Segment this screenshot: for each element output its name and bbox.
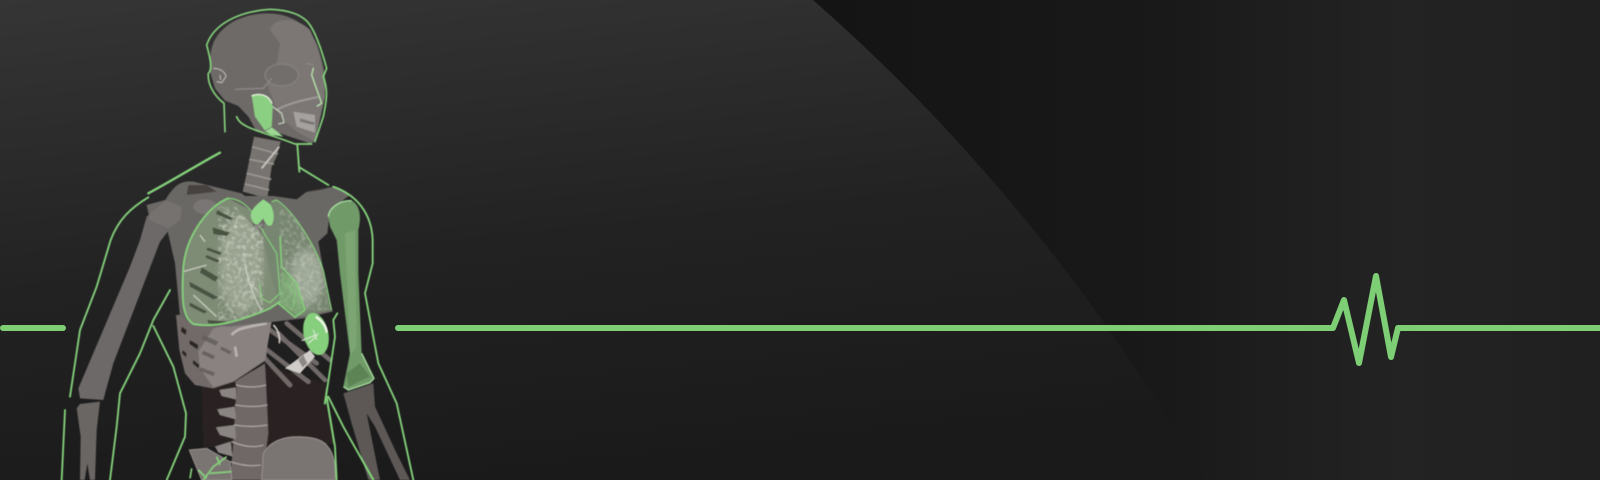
jaw gland bbox=[252, 94, 284, 137]
heart bbox=[278, 270, 305, 317]
right lung bbox=[262, 200, 332, 317]
right forearm bones bbox=[343, 383, 410, 480]
thymus bbox=[251, 199, 274, 226]
abdominal cavity bbox=[202, 367, 335, 450]
ECG line with heartbeat pulse bbox=[398, 276, 1600, 363]
neck vertebrae bbox=[243, 137, 281, 198]
shoulder highlight bbox=[147, 200, 182, 228]
chest bones bbox=[165, 181, 350, 327]
small nerve branches bbox=[190, 457, 232, 480]
left lung bbox=[183, 198, 280, 325]
rib cage left bbox=[176, 310, 267, 388]
lower torso: ribs, spine, pelvis bbox=[176, 310, 335, 480]
body outline bbox=[62, 145, 413, 480]
left upper arm bone bbox=[78, 200, 172, 400]
chest bbox=[147, 181, 350, 327]
pelvis bbox=[189, 437, 335, 480]
spleen and rib fragment bbox=[285, 311, 332, 373]
stomach highlight bbox=[232, 323, 267, 357]
ear bbox=[213, 68, 226, 83]
lung texture bbox=[183, 207, 327, 325]
stomach bbox=[198, 322, 272, 387]
skull bbox=[207, 9, 327, 144]
rib gaps bbox=[181, 327, 199, 368]
left forearm bones bbox=[77, 402, 100, 480]
arm bones bbox=[77, 200, 410, 480]
head outline bbox=[207, 9, 327, 144]
face highlight bbox=[267, 20, 325, 142]
rib shadows bbox=[189, 210, 233, 325]
human body figure bbox=[62, 9, 413, 480]
eye socket bbox=[265, 64, 298, 86]
background: dark curved panel bbox=[813, 0, 1600, 480]
back ribs right bbox=[265, 323, 330, 385]
teeth bbox=[293, 112, 315, 133]
green upper arm bone bbox=[328, 201, 374, 390]
spine bbox=[215, 363, 268, 480]
ECG line left segment bbox=[3, 325, 63, 331]
broken rib fragment bbox=[285, 350, 315, 373]
lung and heart outlines bbox=[183, 198, 332, 325]
spleen bbox=[299, 311, 332, 357]
